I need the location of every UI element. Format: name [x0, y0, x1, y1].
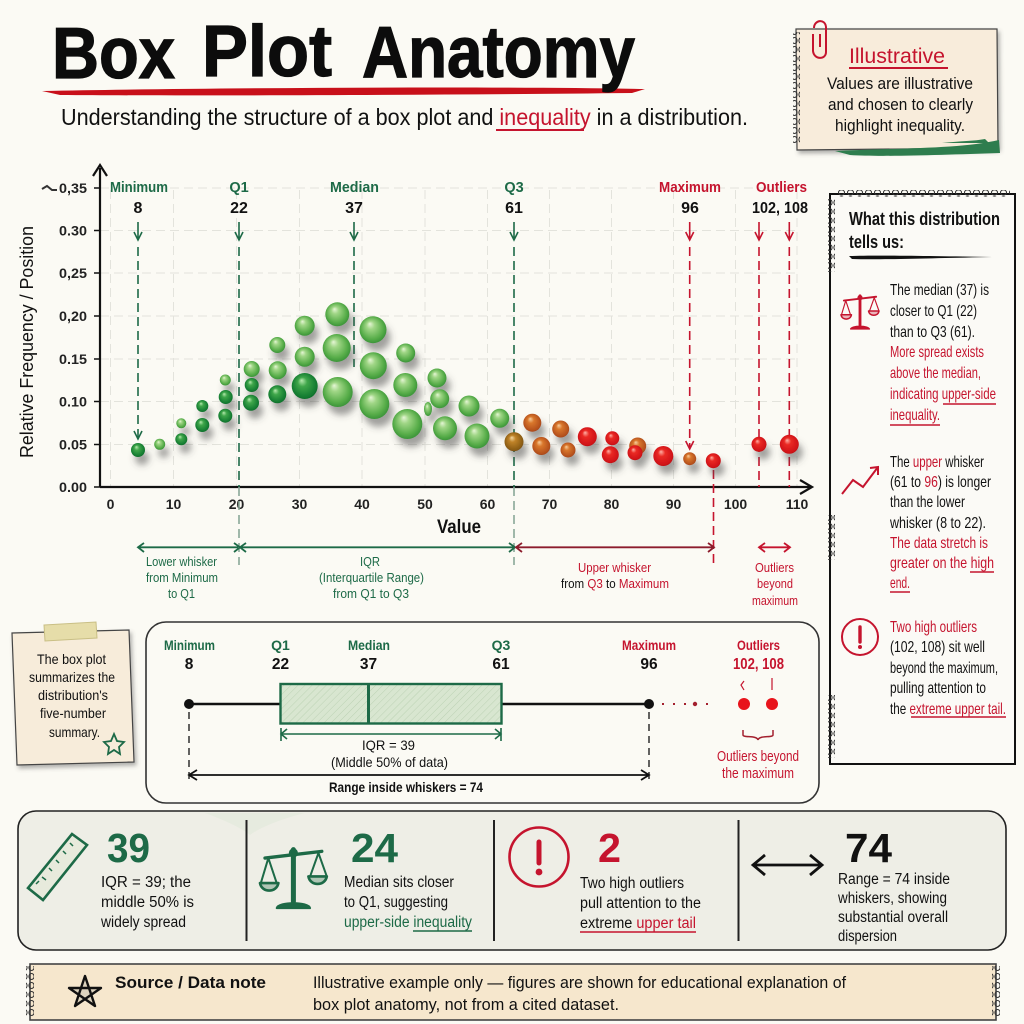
- sticky note: [12, 622, 134, 765]
- y axis: [42, 165, 107, 495]
- note text: five-number: [40, 705, 106, 721]
- five-number labels: 22: [272, 656, 289, 673]
- range arrow: [189, 712, 649, 795]
- span labels: Lower whisker: [146, 555, 217, 569]
- title text: [52, 12, 635, 94]
- title underline brush: [42, 88, 645, 95]
- whiskers: [184, 699, 654, 709]
- insight: median: than to Q3 (61).: [890, 324, 975, 341]
- note text: The box plot: [37, 651, 106, 667]
- panel: box plot: [146, 622, 819, 803]
- y axis: 0.15: [59, 351, 87, 367]
- data bubbles: [131, 302, 799, 468]
- title text: Box: [52, 14, 175, 94]
- span labels: maximum: [752, 594, 798, 608]
- note body: Values are illustrative: [827, 75, 973, 93]
- note: illustrative: [793, 21, 1000, 156]
- note text: [29, 651, 115, 740]
- marker labels: Median: [330, 180, 379, 196]
- insight: whisker: [889, 454, 994, 592]
- marker labels: Maximum: [659, 180, 721, 196]
- stat: iqr: widely spread: [100, 914, 186, 931]
- stat: range: whiskers, showing: [837, 890, 947, 907]
- icon: star: [104, 734, 124, 754]
- insight: whisker: The data stretch is: [890, 535, 988, 552]
- insight: whisker: The upper whisker: [890, 454, 984, 471]
- title: [42, 12, 645, 95]
- range arrow: Range inside whiskers = 74: [329, 779, 483, 795]
- note text: distribution's: [38, 687, 108, 703]
- icon: alert: [510, 828, 568, 886]
- stat: median distance: upper-side inequality: [344, 914, 472, 931]
- stat: range: dispersion: [838, 928, 897, 945]
- marker labels: Outliers: [756, 180, 807, 196]
- grid lines: [100, 188, 800, 487]
- span labels: IQR: [360, 555, 380, 569]
- insight: whisker: greater on the high: [890, 555, 994, 572]
- y axis: 0,35: [59, 180, 87, 196]
- span labels: (Interquartile Range): [319, 571, 424, 585]
- iqr arrow: IQR = 39: [362, 737, 415, 753]
- note paper: [12, 630, 134, 765]
- y axis: 0.05: [59, 436, 87, 452]
- stat: range: substantial overall: [838, 909, 948, 926]
- insight: outliers: (102, 108) sit well: [890, 639, 985, 656]
- five-number labels: Outliers: [737, 637, 780, 653]
- panel frame: [146, 622, 819, 803]
- source text: Illustrative example only — figures are shown for educational explanation of: [313, 974, 846, 992]
- stat: iqr: 39: [107, 825, 150, 871]
- five-number labels: Maximum: [622, 637, 676, 653]
- marker labels: 8: [134, 200, 143, 217]
- insight: median: [890, 282, 996, 425]
- iqr arrow: [281, 728, 501, 770]
- x axis: 90: [666, 496, 681, 512]
- span labels: from Minimum: [146, 571, 218, 585]
- stat: median distance: Median sits closer: [344, 874, 454, 891]
- icon: double arrow: [753, 855, 822, 875]
- five-number labels: Q1: [271, 637, 290, 653]
- y axis: 0.30: [59, 222, 87, 238]
- stat: range: 74: [845, 825, 892, 871]
- five-number labels: Q3: [492, 637, 511, 653]
- marker labels: 102, 108: [752, 200, 808, 217]
- span labels: [146, 555, 798, 608]
- y axis: 0,20: [59, 308, 87, 324]
- x axis: 100: [724, 496, 747, 512]
- stat: outliers: [510, 825, 701, 932]
- x axis: 10: [166, 496, 181, 512]
- icon: rising arrow: [842, 467, 878, 494]
- five-number labels: 61: [492, 656, 510, 673]
- x axis title: Value: [437, 517, 481, 538]
- five-number labels: 102, 108: [733, 656, 784, 673]
- panel: key statistics: [18, 811, 1006, 950]
- five-number labels: 37: [360, 656, 377, 673]
- x axis: 70: [542, 496, 557, 512]
- stat: iqr: [28, 825, 194, 931]
- iqr box: [280, 684, 502, 724]
- five-number labels: [164, 637, 784, 673]
- span labels: Upper whisker: [578, 561, 651, 575]
- insight: whisker: end.: [890, 575, 910, 592]
- x axis: 50: [417, 496, 433, 512]
- insight: median: inequality.: [890, 407, 940, 424]
- note body: highlight inequality.: [835, 117, 965, 135]
- panel frame: [18, 811, 1006, 950]
- note body: [827, 75, 974, 135]
- icon: star: [69, 976, 101, 1006]
- marker labels: 61: [505, 200, 523, 217]
- outlier dots: [662, 678, 799, 782]
- title text: Anatomy: [362, 13, 635, 93]
- marker labels: Minimum: [110, 180, 168, 196]
- tape: [44, 622, 97, 641]
- stat: outliers: Two high outliers: [580, 875, 684, 892]
- stat: range: [753, 825, 950, 945]
- y axis: 0.00: [59, 479, 87, 495]
- marker labels: 96: [681, 200, 699, 217]
- insight: whisker: than the lower: [890, 494, 965, 511]
- y axis title: Relative Frequency / Position: [17, 226, 37, 458]
- stat: outliers: extreme upper tail: [580, 915, 696, 932]
- stat: outliers: pull attention to the: [580, 895, 701, 912]
- source note: [26, 964, 1000, 1020]
- x axis: 60: [480, 496, 495, 512]
- panel heading: tells us:: [849, 231, 904, 252]
- outlier dots: the maximum: [722, 766, 794, 782]
- iqr arrow: (Middle 50% of data): [331, 754, 448, 770]
- outlier dots: Outliers beyond: [717, 749, 799, 765]
- note text: summary.: [49, 724, 100, 740]
- insight: whisker: whisker (8 to 22).: [889, 515, 986, 532]
- note heading: Illustrative: [849, 45, 945, 68]
- source text: [313, 974, 846, 1014]
- span annotations: [138, 543, 790, 552]
- x axis: 30: [292, 496, 307, 512]
- panel heading: [849, 208, 1000, 259]
- source heading: Source / Data note: [115, 973, 266, 992]
- green brush strip: [835, 140, 1000, 156]
- five-number labels: 96: [640, 656, 658, 673]
- five-number labels: Median: [348, 637, 390, 653]
- stat: median distance: 24: [351, 825, 398, 871]
- five-number labels: Minimum: [164, 637, 215, 653]
- x axis: 20: [229, 496, 244, 512]
- span labels: beyond: [757, 577, 793, 591]
- insight: median: closer to Q1 (22): [890, 303, 977, 320]
- x axis: 80: [604, 496, 619, 512]
- insight: median: More spread exists: [890, 344, 984, 361]
- panel: scatter distribution chart: [17, 165, 812, 608]
- title text: Plot: [202, 12, 332, 92]
- stat: outliers: 2: [598, 825, 621, 871]
- insight: median: The median (37) is: [890, 282, 989, 299]
- stat: range: Range = 74 inside: [838, 871, 950, 888]
- y axis: 0.10: [59, 394, 87, 410]
- x axis: 0: [107, 496, 115, 512]
- panel frame: [830, 194, 1015, 764]
- span labels: Outliers: [755, 561, 794, 575]
- insight: outliers: pulling attention to: [890, 680, 986, 697]
- marker labels: 22: [230, 200, 248, 217]
- marker labels: 37: [345, 200, 363, 217]
- x axis: [100, 480, 812, 512]
- icon: ruler: [28, 834, 87, 900]
- insight: median: above the median,: [890, 365, 981, 382]
- span labels: to Q1: [168, 587, 195, 601]
- marker lines and arrows: [134, 222, 793, 565]
- insight: whisker: (61 to 96) is longer: [890, 474, 992, 491]
- span labels: from Q1 to Q3: [333, 587, 409, 601]
- stat: median distance: to Q1, suggesting: [344, 894, 448, 911]
- x axis: 110: [786, 496, 809, 512]
- note paper: [796, 29, 998, 150]
- note band: [30, 964, 996, 1020]
- marker labels: Q1: [229, 180, 249, 196]
- subtitle: Understanding the structure of a box plot and inequality in a distribution.: [61, 104, 748, 130]
- note text: summarizes the: [29, 669, 115, 685]
- icon: alert: [842, 619, 878, 655]
- stat: median distance: [260, 825, 472, 931]
- stat: iqr: IQR = 39; the: [101, 874, 191, 891]
- icon: scales: [260, 850, 327, 908]
- x axis: 40: [354, 496, 370, 512]
- insight: outliers: [890, 619, 1006, 718]
- y axis: 0,25: [59, 265, 87, 281]
- note body: and chosen to clearly: [828, 96, 974, 114]
- stat: iqr: middle 50% is: [101, 894, 194, 911]
- icon: paperclip: [813, 21, 826, 58]
- panel: what this distribution tells us: [828, 190, 1015, 764]
- span labels: from Q3 to Maximum: [561, 577, 669, 591]
- source text: box plot anatomy, not from a cited dataset.: [313, 996, 619, 1014]
- icon: scales: [841, 296, 879, 329]
- insight: outliers: Two high outliers: [890, 619, 977, 636]
- marker labels: [110, 180, 808, 217]
- five-number labels: 8: [185, 656, 194, 673]
- marker labels: Q3: [504, 180, 524, 196]
